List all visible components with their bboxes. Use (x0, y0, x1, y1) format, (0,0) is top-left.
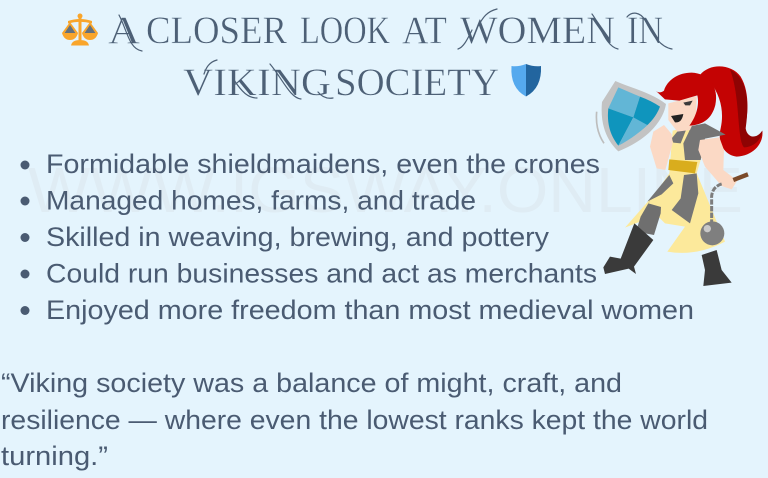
bullet 4: Could run businesses and act as merchants (46, 258, 597, 288)
title line 1: IN (627, 9, 663, 52)
quote: “Viking society was a balance of might, craft, and (1, 368, 622, 398)
title line 2: VIKING (183, 61, 331, 104)
title line 2 (183, 60, 499, 104)
right boot (702, 250, 732, 286)
shield (602, 81, 666, 151)
left boot (603, 223, 653, 274)
left leg (636, 194, 662, 235)
belt (668, 159, 697, 173)
mouth (671, 114, 683, 122)
title line 1 (108, 9, 672, 52)
right arm (698, 137, 737, 189)
title line 1: AT (402, 9, 447, 52)
title line 2: SOCIETY (335, 61, 499, 104)
torso dress (648, 127, 705, 223)
eye (683, 101, 693, 105)
title line 1: A (108, 9, 140, 52)
neck and face (668, 96, 697, 132)
flail (700, 174, 748, 245)
bullet 3: Skilled in weaving, brewing, and pottery (46, 222, 550, 252)
ponytail (700, 66, 762, 157)
bullet list (20, 149, 694, 325)
hair front (656, 73, 716, 126)
title line 1: LOOK (300, 9, 390, 52)
skirt (625, 173, 725, 253)
quote: resilience — where even the lowest ranks kept the world (1, 405, 708, 435)
quote: turning.” (1, 441, 108, 471)
icon: balance scales (62, 14, 98, 46)
title line 1: CLOSER (146, 9, 287, 52)
watermark: WWW.IGSWAY.ONLINE (28, 154, 743, 226)
icon: shield (511, 64, 541, 96)
title line 1: WOMEN (460, 9, 615, 52)
bullet 1: Formidable shieldmaidens, even the crones (46, 149, 600, 179)
bullet 5: Enjoyed more freedom than most medieval women (46, 295, 694, 325)
grey panels (683, 123, 726, 160)
raised arm (650, 125, 673, 170)
bullet 2: Managed homes, farms, and trade (46, 186, 476, 216)
quote (1, 368, 708, 471)
illustration: shieldmaiden warrior (596, 66, 762, 286)
title (62, 9, 672, 104)
